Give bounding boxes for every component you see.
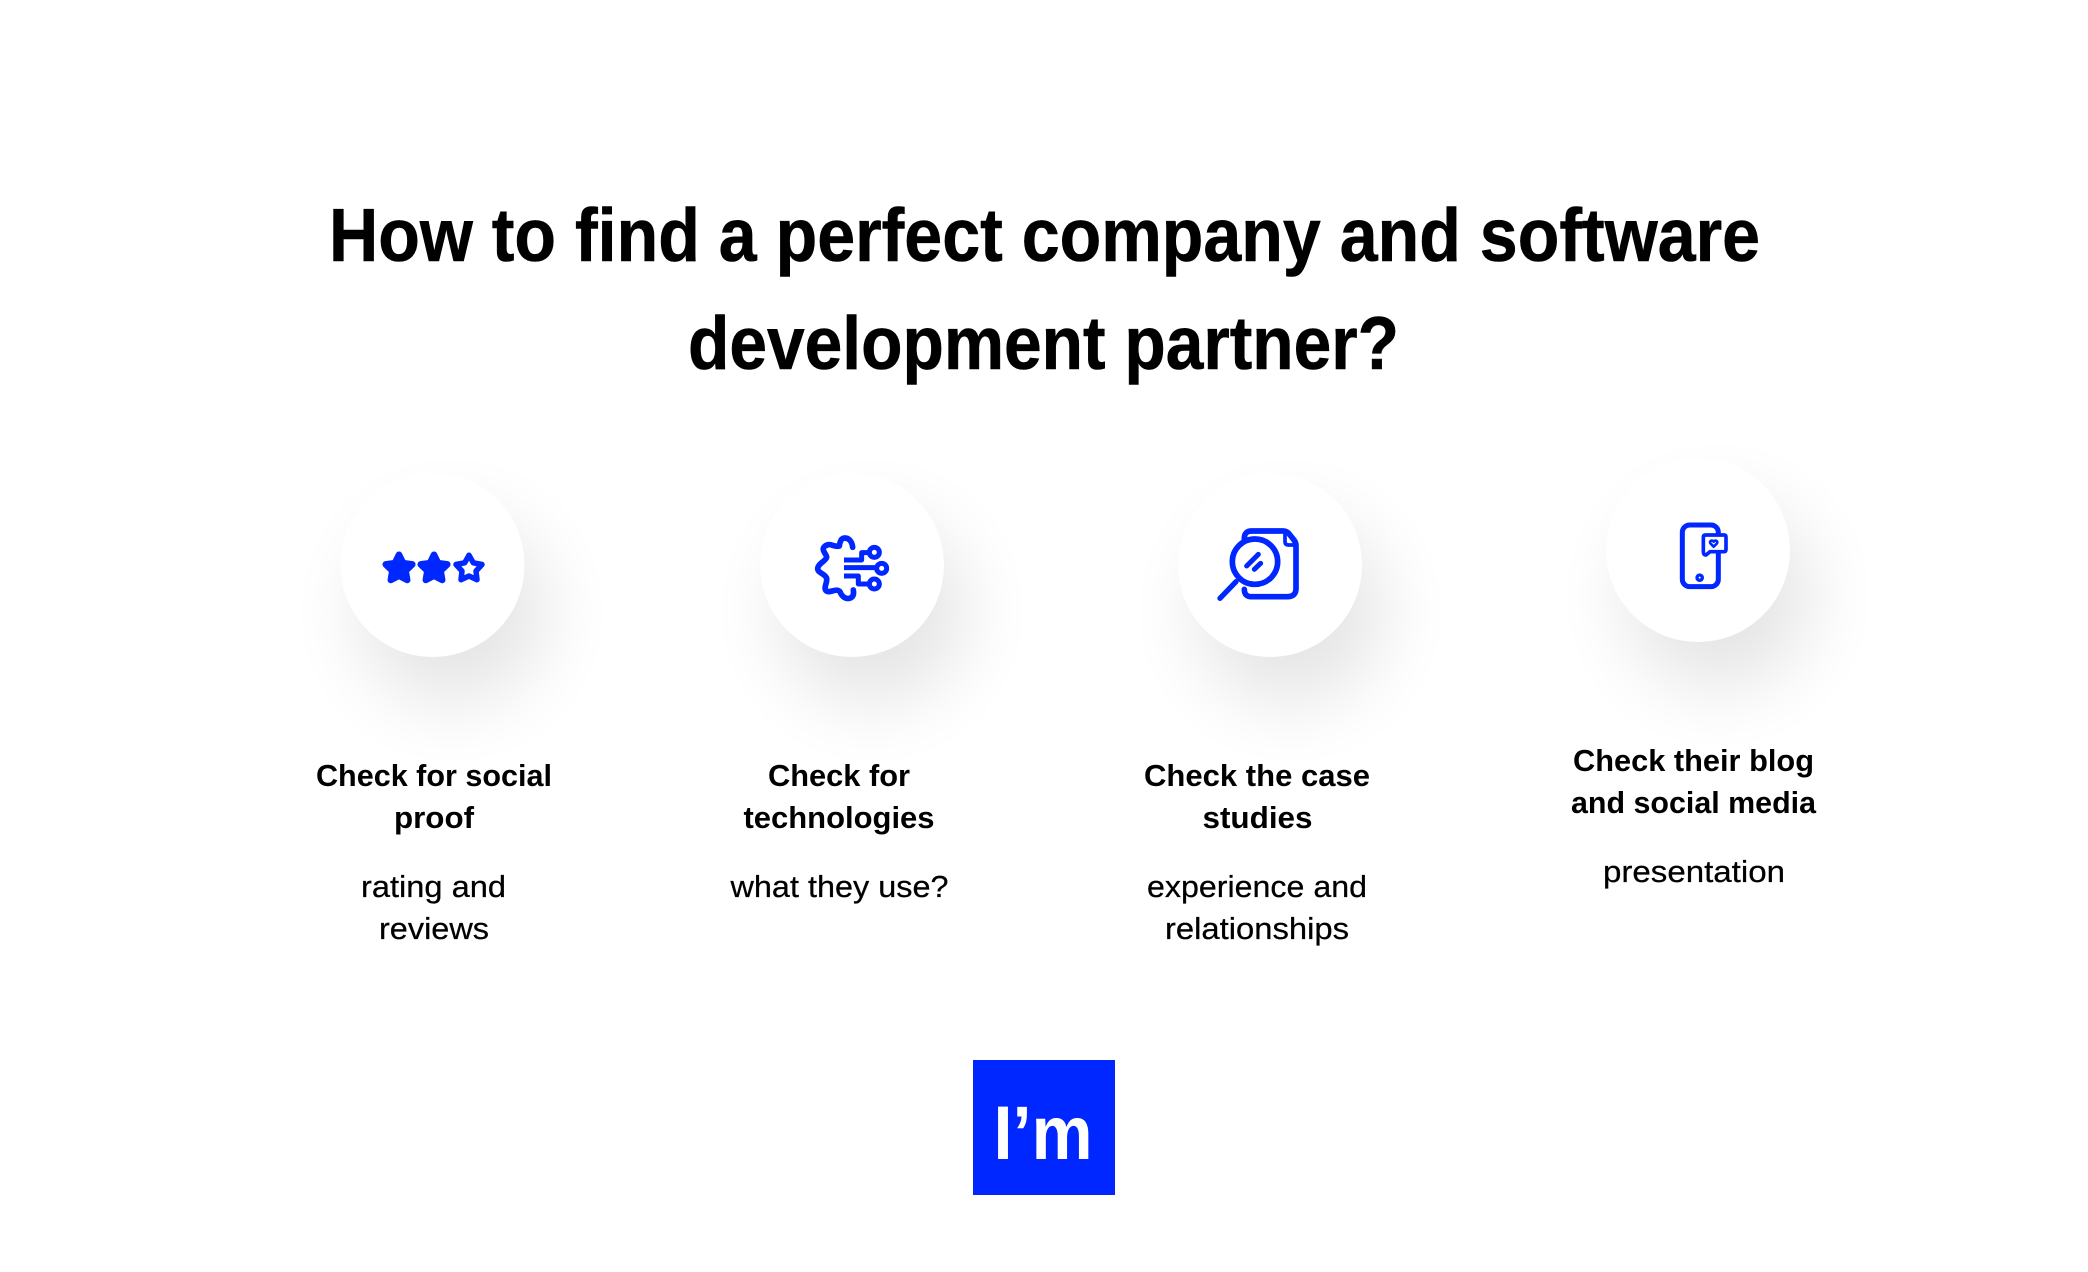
icon: three rating stars: [386, 555, 482, 580]
text: experience and relationships: experience and: [1147, 869, 1367, 904]
heading: check the case studies: Check the case: [1144, 758, 1370, 793]
heading: check for technologies: Check for: [768, 758, 910, 793]
text: rating and reviews: rating and: [361, 869, 506, 904]
title: [329, 193, 1760, 385]
text: presentation: presentation: [1603, 854, 1785, 889]
panel: social proof: [316, 473, 552, 946]
panel: blog and social media: [1571, 458, 1817, 889]
panel: case studies: [1144, 473, 1382, 946]
title: How to find a perfect company and software: [329, 193, 1760, 277]
title: development partner?: [688, 301, 1399, 385]
text: rating and reviews: [361, 869, 506, 946]
text: experience and relationships: [1147, 869, 1367, 946]
icon: phone with heart message: [1682, 525, 1726, 587]
panel: technologies: [729, 473, 964, 904]
circle with shadow: technologies: [760, 473, 964, 702]
heading: check the case studies: [1144, 758, 1370, 835]
heading: check for social proof: proof: [394, 800, 475, 835]
heading: check their blog and social media: and social media: [1571, 785, 1817, 820]
text: what they use?: what they use?: [729, 869, 948, 904]
circle with shadow: social proof: [340, 473, 544, 702]
icon: gear with circuit lines: [818, 538, 887, 599]
logo: [973, 1060, 1115, 1195]
heading: check the case studies: studies: [1202, 800, 1312, 835]
circle with shadow: case studies: [1178, 473, 1382, 702]
heading: check for technologies: technologies: [744, 800, 934, 835]
text: experience and relationships: relationships: [1165, 911, 1349, 946]
heading: check for technologies: [744, 758, 934, 835]
heading: check for social proof: Check for social: [316, 758, 552, 793]
icon: magnifier over document: [1220, 531, 1296, 598]
heading: check their blog and social media: Check their blog: [1573, 743, 1814, 778]
circle with shadow: blog and social media: [1606, 458, 1810, 687]
text: rating and reviews: reviews: [379, 911, 489, 946]
heading: check for social proof: [316, 758, 552, 835]
logo: I’m: [994, 1091, 1092, 1176]
heading: check their blog and social media: [1571, 743, 1817, 820]
